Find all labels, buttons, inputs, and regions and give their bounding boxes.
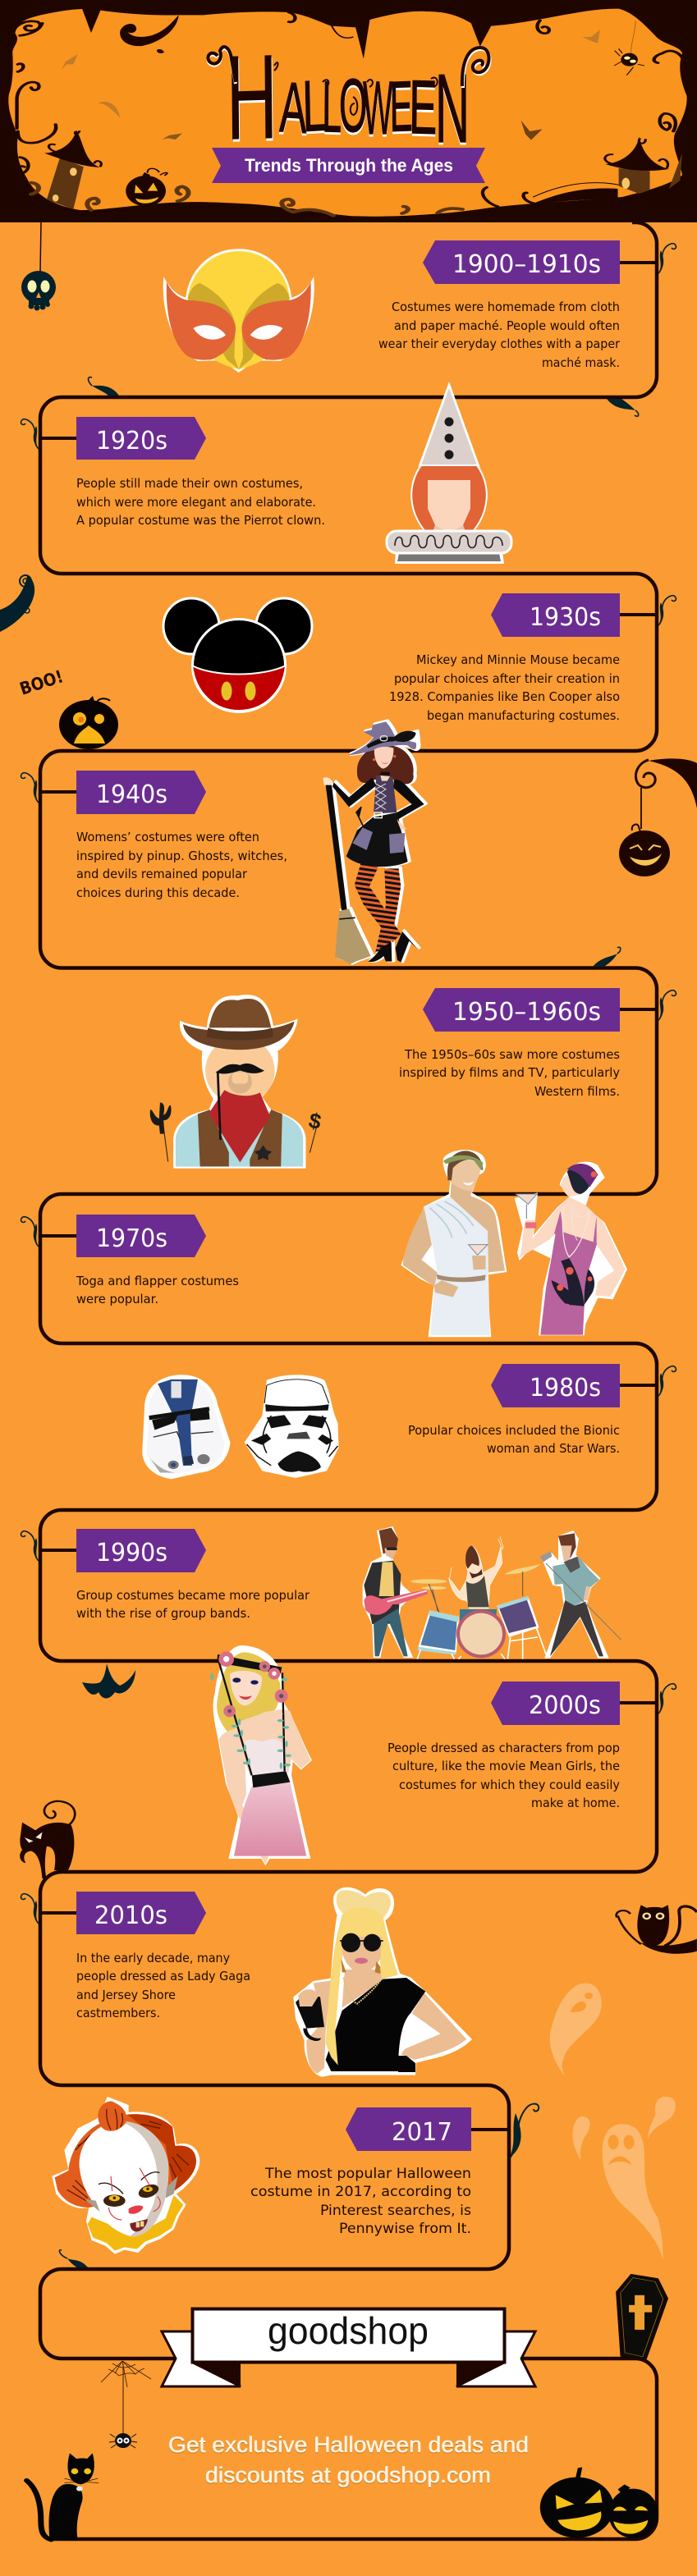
connector 1940 bbox=[40, 790, 76, 794]
text 1950-1960s bbox=[399, 1047, 620, 1099]
text 2000s: People dressed as characters from pop bbox=[387, 1741, 620, 1755]
text 2017: The most popular Halloween bbox=[264, 2166, 471, 2182]
text 1950-1960s: Western films. bbox=[534, 1084, 620, 1099]
text 1900-1910s: Costumes were homemade from cloth bbox=[392, 300, 620, 314]
text 1940s: and devils remained popular bbox=[76, 867, 248, 881]
text 1940s bbox=[76, 830, 287, 900]
icon: pennywise clown bbox=[52, 2097, 199, 2254]
main title: H bbox=[226, 29, 278, 166]
main title: O bbox=[339, 64, 367, 148]
main title: N bbox=[435, 53, 470, 162]
text 1900-1910s: and paper maché. People would often bbox=[394, 318, 620, 333]
text 1930s: began manufacturing costumes. bbox=[427, 708, 620, 723]
icon: witch bbox=[323, 721, 426, 964]
text 1930s bbox=[389, 652, 620, 723]
icon: paper mache mask bbox=[163, 249, 314, 373]
section: 1970s bbox=[40, 1150, 627, 1337]
text 1980s bbox=[408, 1423, 620, 1456]
ribbon main bbox=[192, 2309, 504, 2362]
icon: coffin bbox=[617, 2275, 667, 2361]
goodshop logo ribbon bbox=[162, 2309, 535, 2386]
tag 1930s bbox=[491, 593, 620, 637]
tag 2010s bbox=[76, 1892, 206, 1934]
timeline path bbox=[40, 222, 657, 2539]
subtitle ribbon: Trends Through the Ages bbox=[245, 155, 453, 176]
hanging branch strand bbox=[331, 25, 353, 38]
curls: lower edge brown bbox=[31, 183, 462, 216]
text 1920s: which were more elegant and elaborate. bbox=[76, 495, 316, 510]
main title: L bbox=[301, 66, 327, 148]
tag 1950-1960s bbox=[423, 988, 620, 1032]
icon: stormtrooper helmet bbox=[245, 1375, 339, 1478]
main title: L bbox=[301, 68, 327, 150]
tag 1920s: 1920s bbox=[96, 427, 167, 455]
icon: perched owl bbox=[617, 1905, 697, 1954]
icon: toga man and flapper woman bbox=[401, 1150, 627, 1337]
ribbon left tail bbox=[162, 2331, 241, 2386]
main title: L bbox=[322, 68, 342, 150]
text 2017 bbox=[250, 2166, 471, 2237]
tag 1980s bbox=[491, 1364, 620, 1407]
text 1940s: inspired by pinup. Ghosts, witches, bbox=[76, 849, 287, 863]
icon: hanging smiling pumpkin bbox=[619, 758, 697, 876]
text 1950-1960s: inspired by films and TV, particularly bbox=[399, 1065, 620, 1080]
connector 1920 bbox=[40, 437, 76, 440]
text 1920s: A popular costume was the Pierrot clown. bbox=[76, 513, 325, 528]
figure: flapper woman bbox=[515, 1162, 627, 1335]
text 1920s bbox=[76, 476, 325, 528]
text 2017: Pennywise from It. bbox=[339, 2221, 471, 2237]
tag 1940s bbox=[76, 771, 206, 814]
icon: clone trooper helmet bbox=[142, 1375, 230, 1479]
text 1950-1960s: The 1950s–60s saw more costumes bbox=[404, 1047, 620, 1062]
icon: lady gaga bbox=[293, 1887, 472, 2077]
icon: ghost faded bbox=[550, 1983, 602, 2078]
icon: cobweb and spider bbox=[101, 2361, 151, 2448]
text 1990s bbox=[76, 1588, 310, 1621]
main title: H bbox=[227, 31, 279, 168]
tag 1940s: 1940s bbox=[96, 780, 167, 809]
text 1900-1910s: maché mask. bbox=[542, 355, 620, 370]
text 2000s bbox=[387, 1741, 620, 1810]
text 1990s: with the rise of group bands. bbox=[76, 1606, 250, 1621]
text 1930s: 1928. Companies like Ben Cooper also bbox=[389, 689, 620, 704]
text 2000s: culture, like the movie Mean Girls, the bbox=[392, 1759, 620, 1773]
connector 2010 bbox=[40, 1911, 76, 1915]
icon: teal curling branch left bbox=[0, 575, 34, 632]
connector 2000 bbox=[620, 1701, 657, 1704]
text 1930s: popular choices after their creation in bbox=[394, 671, 620, 686]
curls: header edges bbox=[13, 12, 685, 174]
text 2000s: make at home. bbox=[531, 1796, 620, 1810]
icon: mean girls character bbox=[210, 1645, 312, 1865]
section: 1950-1960s bbox=[150, 988, 657, 1169]
icon: arched black cat bbox=[20, 1801, 75, 1880]
text 1970s: Toga and flapper costumes bbox=[76, 1274, 239, 1288]
section: 2017 bbox=[52, 2097, 509, 2254]
main title: L bbox=[322, 66, 342, 148]
text 2017: costume in 2017, according to bbox=[250, 2184, 471, 2200]
connector 1950 bbox=[620, 1008, 657, 1011]
connector 2017 bbox=[471, 2128, 509, 2131]
main title: E bbox=[409, 64, 438, 150]
witch white sticker edge bbox=[328, 721, 426, 963]
icon: ghost with drops bbox=[572, 2097, 676, 2261]
main title: A bbox=[279, 68, 308, 149]
text 1970s: were popular. bbox=[76, 1292, 158, 1306]
logo text: goodshop bbox=[268, 2309, 429, 2352]
figure: toga man bbox=[401, 1150, 507, 1337]
text 1980s: woman and Star Wars. bbox=[487, 1441, 620, 1456]
tag 1990s: 1990s bbox=[96, 1539, 167, 1567]
icon: jack-o-lanterns bbox=[540, 2468, 658, 2538]
main title bbox=[208, 29, 490, 168]
tag 2010s: 2010s bbox=[94, 1901, 167, 1930]
call to action text: Get exclusive Halloween deals and bbox=[168, 2432, 529, 2457]
tag 1970s bbox=[76, 1215, 206, 1257]
tag 2000s bbox=[491, 1681, 620, 1725]
text 1970s bbox=[76, 1274, 239, 1306]
text 2017: Pinterest searches, is bbox=[320, 2203, 471, 2219]
main title: W bbox=[363, 68, 393, 153]
tag 2000s: 2000s bbox=[529, 1691, 601, 1720]
connector 1980 bbox=[620, 1384, 657, 1387]
tag 1900-1910s: 1900–1910s bbox=[452, 250, 601, 279]
section: 1980s bbox=[142, 1364, 657, 1479]
tag 2017: 2017 bbox=[392, 2118, 452, 2147]
figure: singer bbox=[540, 1531, 621, 1659]
text 2010s bbox=[76, 1951, 250, 2020]
text: boo: BOO! bbox=[17, 666, 66, 699]
tag 1900-1910s bbox=[423, 240, 620, 284]
section: 1940s bbox=[40, 721, 426, 964]
main title: O bbox=[339, 66, 367, 150]
text 1900-1910s: wear their everyday clothes with a paper bbox=[378, 336, 621, 351]
icon: cowboy bbox=[150, 995, 316, 1169]
section: 1920s bbox=[40, 382, 511, 564]
icon: black cat bbox=[26, 2453, 99, 2541]
house: right tower bbox=[605, 137, 682, 194]
text 2010s: In the early decade, many bbox=[76, 1951, 230, 1965]
main title: E bbox=[389, 66, 413, 147]
branch: lower right bbox=[529, 189, 618, 205]
pumpkin: header bbox=[126, 168, 167, 206]
connector curls along timeline bbox=[21, 244, 676, 2258]
main title: A bbox=[279, 71, 308, 152]
connector 1900 bbox=[620, 261, 657, 264]
main title: W bbox=[363, 66, 393, 150]
icon: rock band bbox=[363, 1526, 621, 1659]
subtitle ribbon bbox=[212, 148, 485, 183]
spider: header bbox=[614, 21, 644, 75]
text 1940s: choices during this decade. bbox=[76, 885, 240, 900]
house: left tower bbox=[44, 130, 101, 209]
icon: hanging skull bbox=[21, 222, 56, 310]
figure: drummer bbox=[449, 1536, 503, 1608]
tag 1920s bbox=[76, 417, 206, 460]
branch: top left swirl bbox=[120, 15, 179, 46]
tag 1930s: 1930s bbox=[530, 603, 601, 632]
text 2010s: castmembers. bbox=[76, 2006, 160, 2020]
text 1900-1910s bbox=[378, 300, 621, 370]
text 1980s: Popular choices included the Bionic bbox=[408, 1423, 620, 1438]
tag 2017 bbox=[346, 2107, 471, 2151]
ribbon right tail bbox=[456, 2331, 535, 2386]
section: 2010s bbox=[40, 1887, 472, 2077]
connector 1930 bbox=[620, 613, 657, 616]
text 2000s: costumes for which they could easily bbox=[399, 1778, 620, 1792]
tag 1980s: 1980s bbox=[530, 1374, 601, 1402]
main title: E bbox=[409, 66, 438, 153]
main title: N bbox=[435, 56, 470, 165]
tag 1950-1960s: 1950–1960s bbox=[452, 998, 601, 1027]
call to action text bbox=[168, 2432, 529, 2487]
icon: dollar prop: $ bbox=[307, 1108, 323, 1134]
section: 1900-1910s bbox=[163, 240, 657, 373]
icon: bat under timeline bbox=[82, 1663, 135, 1699]
text 2010s: people dressed as Lady Gaga bbox=[76, 1969, 250, 1983]
icon: pumpkin sad bbox=[59, 696, 118, 749]
text 1920s: People still made their own costumes, bbox=[76, 476, 303, 491]
drum kit bbox=[410, 1564, 548, 1659]
tag 1990s bbox=[76, 1529, 206, 1572]
section: 1930s bbox=[163, 593, 657, 723]
text 1930s: Mickey and Minnie Mouse became bbox=[416, 652, 620, 667]
figure: guitarist bbox=[363, 1526, 428, 1658]
tag 1970s: 1970s bbox=[96, 1224, 167, 1253]
icon: pierrot clown bbox=[387, 382, 511, 564]
section: 1990s bbox=[40, 1526, 621, 1659]
main title: E bbox=[389, 69, 413, 149]
connector 1990 bbox=[40, 1549, 76, 1552]
call to action text: discounts at goodshop.com bbox=[205, 2463, 491, 2487]
text 2010s: and Jersey Shore bbox=[76, 1988, 176, 2002]
icon: mickey mouse bbox=[163, 598, 312, 713]
bats: header bbox=[62, 30, 600, 140]
connector 1970 bbox=[40, 1234, 76, 1238]
section: 2000s bbox=[210, 1645, 657, 1865]
text 1990s: Group costumes became more popular bbox=[76, 1588, 310, 1603]
text 1940s: Womens’ costumes were often bbox=[76, 830, 259, 844]
